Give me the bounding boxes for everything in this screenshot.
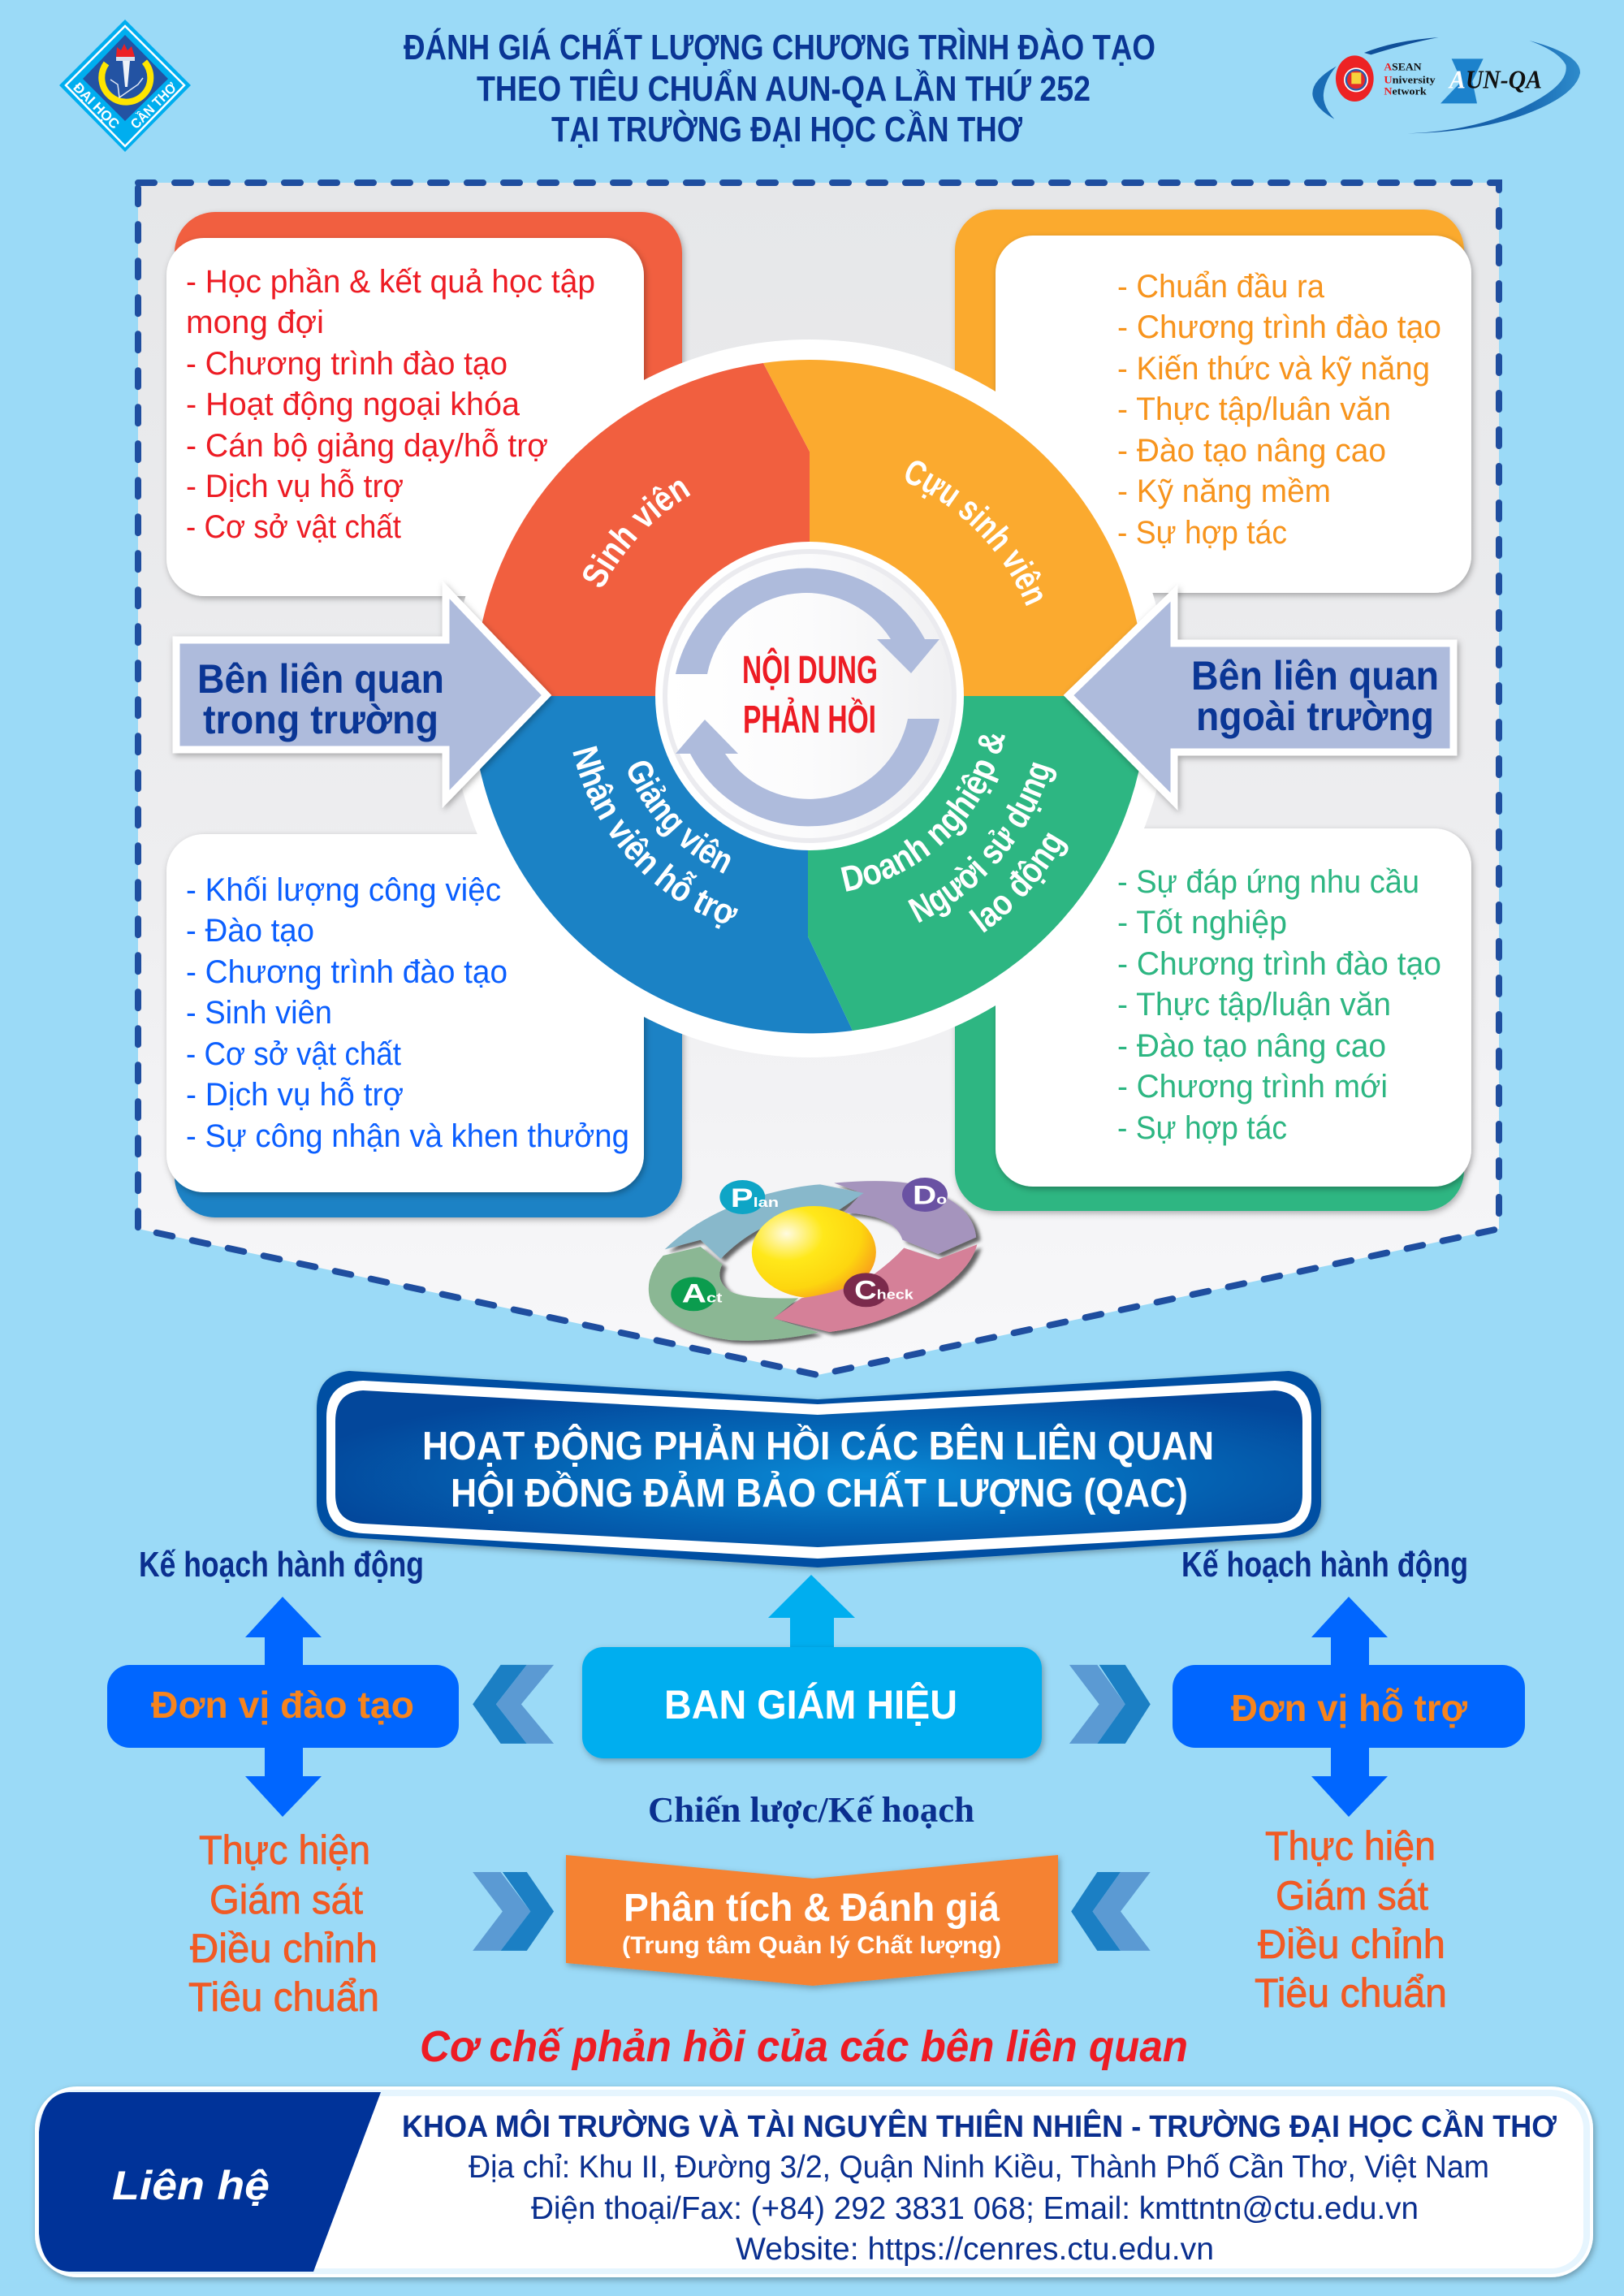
title: TẠI TRƯỜNG ĐẠI HỌC CẦN THƠ [551,109,1022,149]
list: employer topics: - Đào tạo nâng cao [1117,1028,1386,1064]
list: student topics: - Hoạt động ngoại khóa [186,387,520,422]
segment label: Giảng viên, Nhân viên hỗ trợ: Nhân viên hỗ trợ [572,746,738,929]
list: right actions: Giám sát [1276,1873,1428,1918]
list: right actions [1255,1823,1447,2016]
list: alumni topics: - Kỹ năng mềm [1117,473,1331,509]
list: lecturer topics: - Cơ sở vật chất [186,1036,401,1072]
list: student topics: - Dịch vụ hỗ trợ [186,468,404,504]
list: student topics: - Cơ sở vật chất [186,509,401,545]
banner: analysis and evaluation: (Trung tâm Quản lý Chất lượng) [622,1932,1001,1959]
arrow: external stakeholders: Bên liên quan [1191,653,1439,698]
list: employer topics: - Chương trình đào tạo [1117,946,1441,982]
white ring behind pie [451,339,1168,1057]
arrow: external stakeholders [1069,593,1453,802]
logo: ASEAN University Network and AUN-QA: ASEAN [1384,62,1422,73]
icon: cycle arrows [676,569,939,826]
list: employer topics: - Thực tập/luận văn [1117,987,1391,1023]
list: employer topics [1117,864,1441,1146]
center circle: feedback content [655,542,964,850]
segment label: Doanh nghiệp, Người sử dụng lao động: Doanh nghiệp & [841,734,1005,892]
list: student topics [186,264,595,545]
icon: PDCA cycle: Do [913,1182,947,1210]
contact label tab: Liên hệ [112,2163,270,2208]
icon: PDCA cycle: Act [682,1279,722,1308]
logo: ASEAN University Network and AUN-QA: AUN-QA [1448,64,1542,93]
heading: Nội dung phản hồi: PHẢN HỒI [743,697,876,742]
list: employer topics: - Sự đáp ứng nhu cầu [1117,864,1419,900]
contact label tab [39,2092,381,2272]
list: alumni topics: - Thực tập/luân văn [1117,391,1391,427]
list: lecturer topics [186,872,629,1154]
heading: stakeholder feedback mechanism: Cơ chế phản hồi của các bên liên quan [420,2022,1188,2071]
contact details: Điện thoại/Fax: (+84) 292 3831 068; Email: kmttntn@ctu.edu.vn [531,2191,1419,2226]
list: alumni topics: - Chương trình đào tạo [1117,309,1441,345]
segment label: Doanh nghiệp, Người sử dụng lao động [841,734,1069,932]
banner: stakeholder feedback activity: HOẠT ĐỘNG PHẢN HỒI CÁC BÊN LIÊN QUAN [422,1424,1214,1468]
segment label: Doanh nghiệp, Người sử dụng lao động: Người sử dụng [908,762,1057,923]
arrows: chevrons [473,1665,1151,1951]
arrow: internal stakeholders: trong trường [203,697,438,742]
list: alumni topics: - Đào tạo nâng cao [1117,433,1386,469]
box: university board with up arrow: BAN GIÁM HIỆU [664,1682,957,1727]
list: right actions: Tiêu chuẩn [1255,1970,1447,2016]
segment label: Doanh nghiệp, Người sử dụng lao động: lao động [968,832,1069,932]
box: university board with up arrow [582,1575,1042,1758]
list: alumni topics [1117,269,1441,551]
panel: alumni card [955,210,1471,593]
list: left actions [188,1827,379,2020]
list: left actions: Tiêu chuẩn [188,1974,379,2020]
list: alumni topics: - Chuẩn đầu ra [1117,269,1325,305]
icon: PDCA cycle: Plan [731,1184,779,1213]
list: employer topics: - Tốt nghiệp [1117,905,1287,940]
list: lecturer topics: - Chương trình đào tạo [186,954,508,990]
icon: PDCA cycle: Check [854,1276,914,1305]
list: lecturer topics: - Đào tạo [186,913,314,949]
list: left actions: Giám sát [209,1877,363,1922]
segment label: Giảng viên, Nhân viên hỗ trợ: Giảng viên [628,761,731,874]
heading: Nội dung phản hồi [742,647,878,742]
list: left actions: Thực hiện [199,1827,370,1873]
arrow: internal stakeholders: Bên liên quan [197,656,444,702]
panel: contact [37,2088,1592,2276]
title: ĐÁNH GIÁ CHẤT LƯỢNG CHƯƠNG TRÌNH ĐÀO TẠO [404,27,1155,67]
logo: ASEAN University Network and AUN-QA: University [1384,74,1436,85]
list: lecturer topics: - Sự công nhận và khen thưởng [186,1118,629,1154]
contact details: KHOA MÔI TRƯỜNG VÀ TÀI NGUYÊN THIÊN NHIÊN - TRƯỜNG ĐẠI HỌC CẦN THƠ [402,2108,1557,2144]
icon: PDCA cycle [649,1178,977,1341]
banner: stakeholder feedback activity: HỘI ĐỒNG ĐẢM BẢO CHẤT LƯỢNG (QAC) [451,1471,1188,1516]
list: student topics: mong đợi [186,305,324,340]
list: alumni topics: - Sự hợp tác [1117,515,1287,551]
contact details: Địa chỉ: Khu II, Đường 3/2, Quận Ninh Kiều, Thành Phố Cần Thơ, Việt Nam [469,2150,1489,2185]
title: THEO TIÊU CHUẨN AUN-QA LẦN THỨ 252 [477,67,1091,109]
list: employer topics: - Chương trình mới [1117,1069,1388,1105]
box: training units with arrows: Đơn vị đào tạo [151,1684,414,1726]
panel: employer card [955,828,1471,1211]
contact details: Website: https://cenres.ctu.edu.vn [736,2232,1214,2267]
list: left actions: Điều chỉnh [190,1926,378,1971]
banner: analysis and evaluation [566,1855,1058,1986]
box: support units with arrows: Đơn vị hỗ trợ [1231,1687,1467,1729]
label: strategy and plan: Chiến lược/Kế hoạch [648,1790,974,1830]
title [404,27,1155,149]
logo: ASEAN University Network and AUN-QA [1312,37,1580,133]
arrow: internal stakeholders [176,590,546,799]
panel: lecturer card [166,834,682,1217]
segment label: Sinh viên: Sinh viên [583,481,690,587]
panel: stakeholder diagram [135,179,1502,1377]
logo: Can Tho University [59,19,191,152]
chart: four-segment stakeholder circle [472,360,1147,1033]
list: lecturer topics: - Khối lượng công việc [186,872,501,908]
list: lecturer topics: - Dịch vụ hỗ trợ [186,1076,404,1113]
logo: Can Tho University: CẦN THƠ [127,80,180,132]
label: action plan left: Kế hoạch hành động [139,1545,424,1585]
list: right actions: Thực hiện [1265,1823,1436,1869]
banner: stakeholder feedback activity [317,1371,1321,1567]
contact details [402,2108,1557,2267]
list: employer topics: - Sự hợp tác [1117,1110,1287,1146]
arrow: external stakeholders: ngoài trường [1196,694,1434,739]
label: action plan right: Kế hoạch hành động [1181,1545,1468,1585]
list: alumni topics: - Kiến thức và kỹ năng [1117,351,1430,387]
list: lecturer topics: - Sinh viên [186,995,332,1031]
list: student topics: - Chương trình đào tạo [186,346,508,382]
segment label: Cựu sinh viên: Cựu sinh viên [905,460,1043,606]
list: right actions: Điều chỉnh [1258,1922,1445,1967]
logo: Can Tho University: ĐẠI HỌC [70,80,123,132]
list: student topics: - Học phần & kết quả học tập [186,264,595,300]
banner: analysis and evaluation: Phân tích & Đánh giá [624,1887,1000,1930]
heading: Nội dung phản hồi: NỘI DUNG [742,647,878,692]
panel: student card [166,212,682,596]
logo: ASEAN University Network and AUN-QA: Network [1384,86,1427,97]
box: support units with arrows [1173,1597,1525,1817]
box: training units with arrows [107,1597,459,1817]
list: student topics: - Cán bộ giảng dạy/hỗ trợ [186,427,548,464]
